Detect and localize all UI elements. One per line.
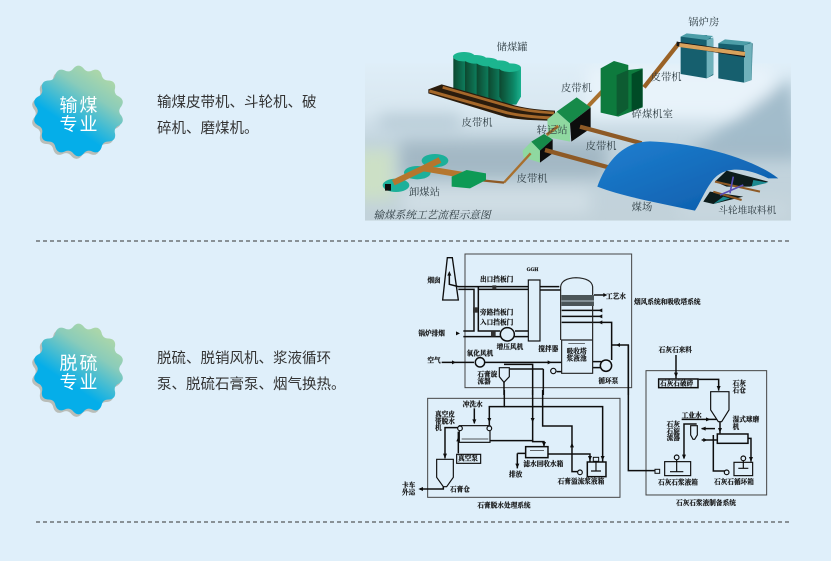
labels: 旁路挡板门 bbox=[480, 307, 514, 316]
limestone cyclone bbox=[691, 426, 697, 439]
labels bbox=[373, 15, 777, 222]
coal storage silos bbox=[453, 52, 521, 105]
labels: 机 bbox=[435, 423, 442, 432]
labels: 石膏旋 bbox=[477, 369, 498, 378]
badge: 输煤专业: 输煤 bbox=[60, 96, 100, 116]
limestone crusher bbox=[659, 379, 698, 388]
labels: 出口挡板门 bbox=[480, 275, 514, 284]
text: coal handling description: 碎机、磨煤机。 bbox=[157, 121, 258, 137]
labels: 循环泵 bbox=[598, 376, 619, 385]
chimney bbox=[443, 258, 458, 300]
belts to coal yard bbox=[478, 126, 642, 183]
labels: 排放 bbox=[509, 470, 523, 479]
badge: 脱硫专业: 脱硫 bbox=[60, 354, 100, 374]
gypsum silo bbox=[437, 459, 453, 487]
badge: 脱硫专业 bbox=[32, 324, 123, 417]
text: coal handling description bbox=[157, 94, 316, 137]
labels: 工业水 bbox=[682, 410, 702, 419]
flow arrows bbox=[418, 418, 605, 491]
labels bbox=[658, 345, 760, 507]
coal unloading station bbox=[383, 154, 486, 192]
coal conveying process diagram bbox=[353, 15, 803, 222]
badge: 输煤专业 bbox=[32, 66, 123, 159]
overflow slurry tank bbox=[578, 457, 606, 477]
boiler house bbox=[677, 33, 753, 83]
labels: 石灰 bbox=[667, 420, 680, 429]
limestone slurry preparation system diagram bbox=[628, 297, 767, 507]
labels: 石仓 bbox=[733, 386, 746, 395]
pipes bbox=[628, 345, 751, 471]
filtrate tank bbox=[526, 447, 548, 458]
text: coal handling description: 输煤皮带机、斗轮机、破 bbox=[157, 95, 316, 111]
labels: 碎煤机室 bbox=[632, 107, 673, 120]
belts under silos bbox=[428, 84, 555, 121]
absorber tower bbox=[561, 278, 594, 373]
photo background bbox=[353, 63, 803, 221]
labels: 空气 bbox=[427, 356, 441, 365]
labels: 浆液池 bbox=[567, 354, 587, 363]
labels: 石灰石破碎 bbox=[660, 379, 694, 388]
labels: 石灰石来料 bbox=[659, 345, 692, 354]
labels: 石膏仓 bbox=[450, 485, 470, 494]
labels: 工艺水 bbox=[606, 291, 626, 300]
labels: 烟囱 bbox=[426, 276, 441, 285]
labels: 石旋 bbox=[667, 426, 680, 435]
labels bbox=[402, 400, 605, 509]
labels: 入口挡板门 bbox=[480, 317, 514, 326]
labels: 石膏脱水处理系统 bbox=[477, 500, 531, 509]
belt to crusher room bbox=[588, 84, 609, 106]
labels: 外运 bbox=[402, 487, 416, 496]
labels: 输煤系统工艺流程示意图 bbox=[373, 209, 492, 222]
labels: 皮带机 bbox=[586, 139, 617, 152]
labels: 滤水回收水箱 bbox=[523, 459, 564, 468]
coal yard dome bbox=[597, 141, 778, 211]
system frame bbox=[646, 371, 767, 495]
ducts bbox=[442, 273, 628, 395]
labels: 冲洗水 bbox=[463, 400, 483, 409]
limestone circulation tank bbox=[724, 456, 753, 476]
labels: 锅炉房 bbox=[688, 15, 719, 28]
labels: 皮带机 bbox=[651, 71, 682, 84]
text: desulfurization description: 泵、脱硫石膏泵、烟气换热。 bbox=[157, 377, 346, 393]
labels: 斗轮堆取料机 bbox=[718, 204, 777, 216]
labels: 石灰石浆液制备系统 bbox=[676, 498, 736, 507]
pipes bbox=[420, 390, 603, 489]
labels: 卡车 bbox=[402, 480, 416, 489]
system frame bbox=[428, 398, 620, 497]
wet ball mill bbox=[717, 434, 748, 443]
GGH bbox=[528, 280, 540, 341]
labels: 石灰石循环箱 bbox=[714, 477, 754, 486]
flue gas and absorber system diagram bbox=[418, 254, 632, 395]
belt to boiler house bbox=[644, 43, 679, 87]
vacuum belt filter bbox=[458, 426, 492, 442]
labels: 锅炉排烟 bbox=[418, 329, 445, 338]
text: desulfurization description bbox=[157, 350, 346, 393]
vacuum pump box bbox=[457, 454, 481, 463]
labels: 搅拌器 bbox=[538, 344, 559, 353]
labels: 湿式球磨 bbox=[733, 415, 760, 424]
crusher room bbox=[601, 61, 643, 117]
badge: 脱硫专业: 专业 bbox=[60, 372, 100, 392]
text: desulfurization description: 脱硫、脱销风机、浆液循环 bbox=[157, 351, 331, 367]
labels: 吸收塔 bbox=[567, 346, 587, 355]
limestone slurry tank bbox=[655, 455, 691, 476]
labels: 石膏溢流浆液箱 bbox=[558, 476, 605, 485]
labels: 氧化风机 bbox=[467, 349, 494, 358]
system frame bbox=[465, 254, 632, 388]
labels: 转运站 bbox=[537, 123, 568, 136]
transfer stations bbox=[523, 97, 591, 163]
dampers and fans bbox=[473, 285, 612, 382]
labels bbox=[418, 268, 626, 385]
limestone silo bbox=[711, 392, 729, 422]
labels: 卸煤站 bbox=[409, 185, 440, 198]
labels: 皮带机 bbox=[517, 172, 548, 185]
labels: 流器 bbox=[477, 376, 491, 385]
labels: 皮带机 bbox=[462, 116, 493, 129]
labels: 流器 bbox=[667, 433, 680, 442]
flow arrows bbox=[674, 373, 753, 462]
labels: 石灰石浆液箱 bbox=[658, 478, 698, 487]
labels: 机 bbox=[733, 422, 740, 431]
labels: 带脱水 bbox=[434, 416, 455, 425]
labels: GGH bbox=[527, 268, 538, 273]
flue gas system title: 烟风系统和吸收塔系统 bbox=[633, 297, 701, 306]
labels: 真空泵 bbox=[458, 454, 478, 463]
gypsum dewatering system diagram bbox=[402, 390, 620, 509]
labels: 真空皮 bbox=[435, 410, 455, 419]
labels: 石灰 bbox=[733, 378, 746, 387]
labels: 煤场 bbox=[632, 201, 652, 214]
bucket wheel stacker reclaimer bbox=[703, 171, 768, 204]
labels: 增压风机 bbox=[497, 342, 524, 351]
labels: 储煤罐 bbox=[497, 41, 528, 54]
flow arrows bbox=[447, 271, 620, 364]
badge: 输煤专业: 专业 bbox=[60, 114, 100, 134]
labels: 皮带机 bbox=[561, 81, 593, 94]
